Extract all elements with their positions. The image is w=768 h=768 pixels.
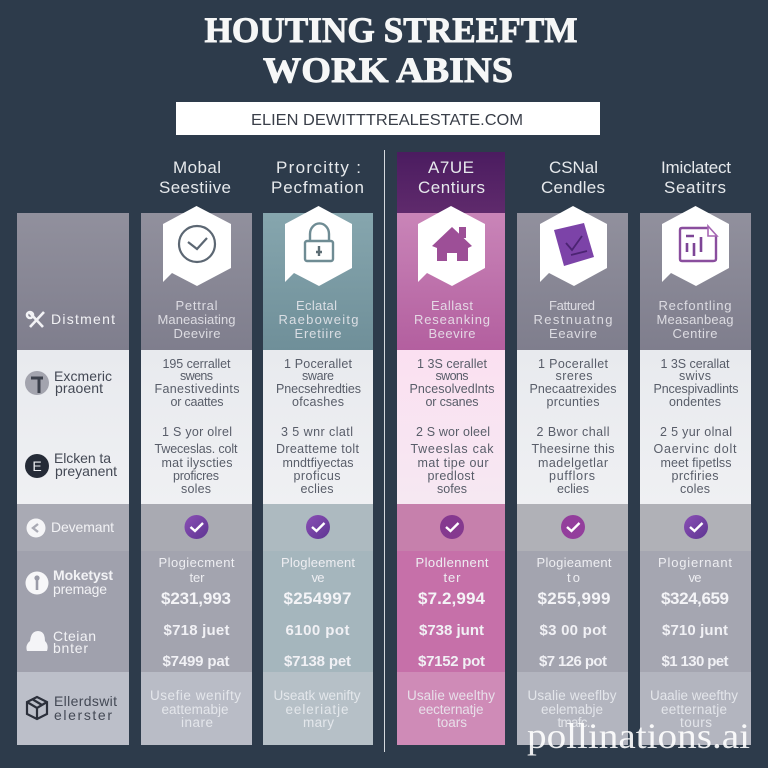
pricing text: Plogiecment	[158, 555, 235, 570]
pricing text: $7 126 pot	[539, 653, 607, 670]
centre divider	[384, 150, 385, 752]
icon: white disc	[26, 518, 46, 538]
description text	[154, 357, 240, 496]
pricing text	[158, 555, 235, 670]
icon: tools	[27, 312, 44, 327]
panel: column 3 highlighted a7ue	[397, 152, 505, 745]
website banner: ELIEN DEWITTTREALESTATE.COM	[251, 112, 523, 129]
footer text: eeleriatje	[286, 702, 348, 717]
panel: column 1 mobal	[141, 158, 252, 745]
check badge	[684, 515, 708, 539]
check badge	[184, 515, 208, 539]
footer text: inare	[181, 715, 213, 730]
footer text: Usalie weeflby	[528, 688, 617, 703]
description text: 2 Bwor chall	[536, 425, 610, 439]
description text: madelgetlar	[538, 456, 608, 470]
icon: grey badge	[25, 371, 49, 395]
label: cteian	[53, 628, 96, 656]
pricing text: $738 junt	[419, 622, 484, 639]
description text: Theesirne this	[532, 442, 614, 456]
description text: Pnecsehredties	[276, 382, 361, 396]
pricing text	[658, 555, 732, 670]
check badge	[306, 515, 330, 539]
label: ellerdswit	[54, 693, 117, 723]
label: excmeric: Excmeric	[54, 368, 112, 384]
heading: Prorcitty :	[276, 158, 361, 177]
panel: column 4 csnal	[517, 158, 628, 745]
feature text	[534, 298, 612, 341]
pricing text: Plogleement	[281, 555, 355, 570]
description text: Pncesolvedlnts	[410, 382, 494, 396]
label: moketyst: Moketyst	[53, 567, 113, 583]
label: excmeric	[54, 368, 112, 396]
icon: dark badge: E	[32, 458, 42, 474]
pricing text: $7.2,994	[418, 589, 486, 608]
description text: Dreatteme tolt	[276, 442, 360, 456]
label: distment: Distment	[51, 311, 115, 327]
title: HOUTING STREEFTM	[204, 10, 578, 50]
label: elcken: Elcken ta	[54, 450, 111, 466]
footer text	[650, 688, 738, 730]
heading: Imiclatect	[661, 158, 731, 177]
footer text: eecternatje	[418, 702, 484, 717]
footer text: Useatk wenifty	[274, 688, 361, 703]
panel: row labels	[17, 213, 129, 745]
feature text: Centire	[672, 326, 718, 341]
description text: predlost	[428, 469, 475, 483]
feature text: Maneasiating	[158, 312, 236, 327]
feature text: Eallast	[431, 298, 473, 313]
description text: 1 S yor olrel	[162, 425, 232, 439]
description text: sreres	[556, 369, 592, 383]
description text: 3 5 wnr clatl	[281, 425, 353, 439]
description text: Tweeslas cak	[410, 442, 494, 456]
pricing text: $254997	[284, 589, 352, 608]
description text: mat tipe our	[418, 456, 488, 470]
description text: proficus	[294, 469, 340, 483]
feature text: Recfontling	[658, 298, 732, 313]
icon: dark badge	[25, 454, 49, 478]
heading	[159, 158, 231, 197]
feature text	[656, 298, 734, 341]
description text: proficres	[173, 469, 219, 483]
feature text: Measanbeag	[656, 312, 734, 327]
icon: house badge	[418, 206, 485, 286]
description text: Fanestivedints	[154, 382, 240, 396]
panel: column 2 prorcitty	[263, 158, 373, 745]
description text: pufflors	[549, 469, 595, 483]
feature text: Eeavire	[549, 326, 597, 341]
feature text	[414, 298, 490, 341]
pricing text: $3 00 pot	[540, 622, 606, 639]
description text	[276, 357, 361, 496]
icon: chart document badge	[662, 206, 729, 286]
check badge	[440, 515, 464, 539]
pricing text: ve	[312, 570, 324, 585]
pricing text: Plogieament	[536, 555, 612, 570]
description text: soles	[181, 482, 211, 496]
pricing text: $255,999	[538, 589, 610, 608]
footer text	[528, 688, 617, 730]
footer text: mary	[303, 715, 334, 730]
description text: Pncespivadlints	[654, 382, 738, 396]
heading: Cendles	[541, 178, 605, 197]
heading	[418, 158, 485, 197]
heading: Seestiive	[159, 178, 231, 197]
heading: Centiurs	[418, 178, 485, 197]
footer text: eetternatje	[661, 702, 727, 717]
heading	[661, 158, 731, 197]
icon: padlock badge	[285, 206, 352, 286]
description text: eclies	[557, 482, 589, 496]
title: WORK ABINS	[263, 50, 513, 90]
description text: 195 cerrallet	[162, 357, 231, 371]
watermark: pollinations.ai	[527, 716, 750, 756]
description text: mndtfiyectas	[282, 456, 354, 470]
description text	[410, 357, 494, 496]
description text: ofcashes	[292, 395, 344, 409]
label: elcken	[54, 450, 117, 479]
label: elcken: preyanent	[55, 463, 117, 479]
title	[204, 10, 578, 90]
description text: swens	[180, 369, 213, 383]
label: moketyst	[53, 567, 113, 597]
description text	[530, 357, 616, 496]
description text: or caattes	[170, 395, 224, 409]
icon: clock badge	[163, 206, 231, 286]
description text: swivs	[679, 369, 711, 383]
description text: or csanes	[426, 395, 478, 409]
pricing text: ve	[688, 570, 702, 585]
footer text	[150, 688, 241, 730]
highlight header	[397, 152, 505, 213]
pricing text: $7499 pat	[162, 653, 230, 670]
pricing text: Plodlennent	[416, 555, 489, 570]
heading: Seatitrs	[664, 178, 726, 197]
description text: sofes	[437, 482, 467, 496]
footer text: Usalie weelthy	[407, 688, 495, 703]
footer text: Uaalie weefthy	[650, 688, 738, 703]
pricing text: 6100 pot	[286, 622, 350, 639]
feature text: Deevire	[174, 326, 220, 341]
description text: coles	[680, 482, 710, 496]
footer text: tours	[680, 715, 712, 730]
feature text: Eretiire	[294, 326, 342, 341]
description text: 1 3S cerallat	[660, 357, 730, 371]
footer text	[407, 688, 495, 730]
icon: box	[27, 697, 47, 719]
feature text	[278, 298, 358, 341]
description text: 1 3S cerallet	[417, 357, 488, 371]
description text: swons	[436, 369, 468, 383]
heading: Pecfmation	[271, 178, 364, 197]
label: excmeric: praoent	[55, 380, 103, 396]
footer text: Usefie wenifty	[150, 688, 241, 703]
description text: prcunties	[546, 395, 600, 409]
pricing text	[536, 555, 612, 670]
pricing text: $1 130 pet	[662, 653, 728, 670]
description text	[654, 357, 738, 496]
label: cteian: bnter	[53, 640, 88, 656]
feature text: Reseanking	[414, 312, 490, 327]
label: moketyst: premage	[53, 581, 107, 597]
pricing text: $710 junt	[662, 622, 728, 639]
heading: Mobal	[173, 158, 221, 177]
heading	[271, 158, 364, 197]
description text: 1 Pocerallet	[538, 357, 609, 371]
pricing text: $231,993	[161, 589, 231, 608]
pricing text: ter	[190, 570, 205, 585]
description text: Tweceslas. colt	[154, 442, 238, 456]
feature text: Eclatal	[296, 298, 337, 313]
feature text: Fattured	[549, 298, 595, 313]
pricing text: to	[567, 570, 580, 585]
description text: 2 S wor oleel	[416, 425, 490, 439]
description text: Pnecaatrexides	[530, 382, 616, 396]
feature text: Raeboweitg	[278, 312, 358, 327]
footer text: tmafc.	[558, 715, 590, 730]
pricing text: $718 juet	[164, 622, 230, 639]
description text: 2 5 yur olnal	[660, 425, 732, 439]
footer text: toars	[437, 715, 467, 730]
feature text: Restnuatng	[534, 312, 612, 327]
description text: sware	[302, 369, 334, 383]
icon: purple checked document badge	[540, 206, 607, 286]
pricing text: $7152 pot	[418, 653, 485, 670]
description text: eclies	[300, 482, 334, 496]
heading	[541, 158, 605, 197]
footer text	[274, 688, 361, 730]
pricing text: $324,659	[661, 589, 729, 608]
label: ellerdswit: Ellerdswit	[54, 693, 117, 709]
label: cteian: Cteian	[53, 628, 96, 644]
label: ellerdswit: elerster	[54, 707, 112, 723]
pricing text	[281, 555, 355, 670]
description text: meet fipetlss	[660, 456, 732, 470]
footer text: eattemabje	[162, 702, 228, 717]
description text: 1 Pocerallet	[284, 357, 353, 371]
pricing text: ter	[444, 570, 461, 585]
description text: mat ilyscties	[162, 456, 232, 470]
heading: CSNal	[549, 158, 598, 177]
description text: prcfiries	[672, 469, 718, 483]
feature text: Pettral	[176, 298, 218, 313]
feature text	[158, 298, 236, 341]
pricing text	[416, 555, 489, 670]
label: devemant: Devemant	[51, 519, 114, 535]
heading: A7UE	[428, 158, 474, 177]
pricing text: $7138 pet	[284, 653, 351, 670]
footer text: eelemabje	[541, 702, 603, 717]
icon: white blob	[26, 631, 48, 651]
description text: ondentes	[669, 395, 721, 409]
icon: key disc	[26, 572, 48, 594]
check badge	[561, 515, 585, 539]
pricing text: Plogiernant	[658, 555, 732, 570]
description text: Oaervinc dolt	[654, 442, 737, 456]
website banner	[176, 102, 600, 135]
panel: column 5 imiclatect	[640, 158, 751, 745]
feature text: Beevire	[428, 326, 476, 341]
